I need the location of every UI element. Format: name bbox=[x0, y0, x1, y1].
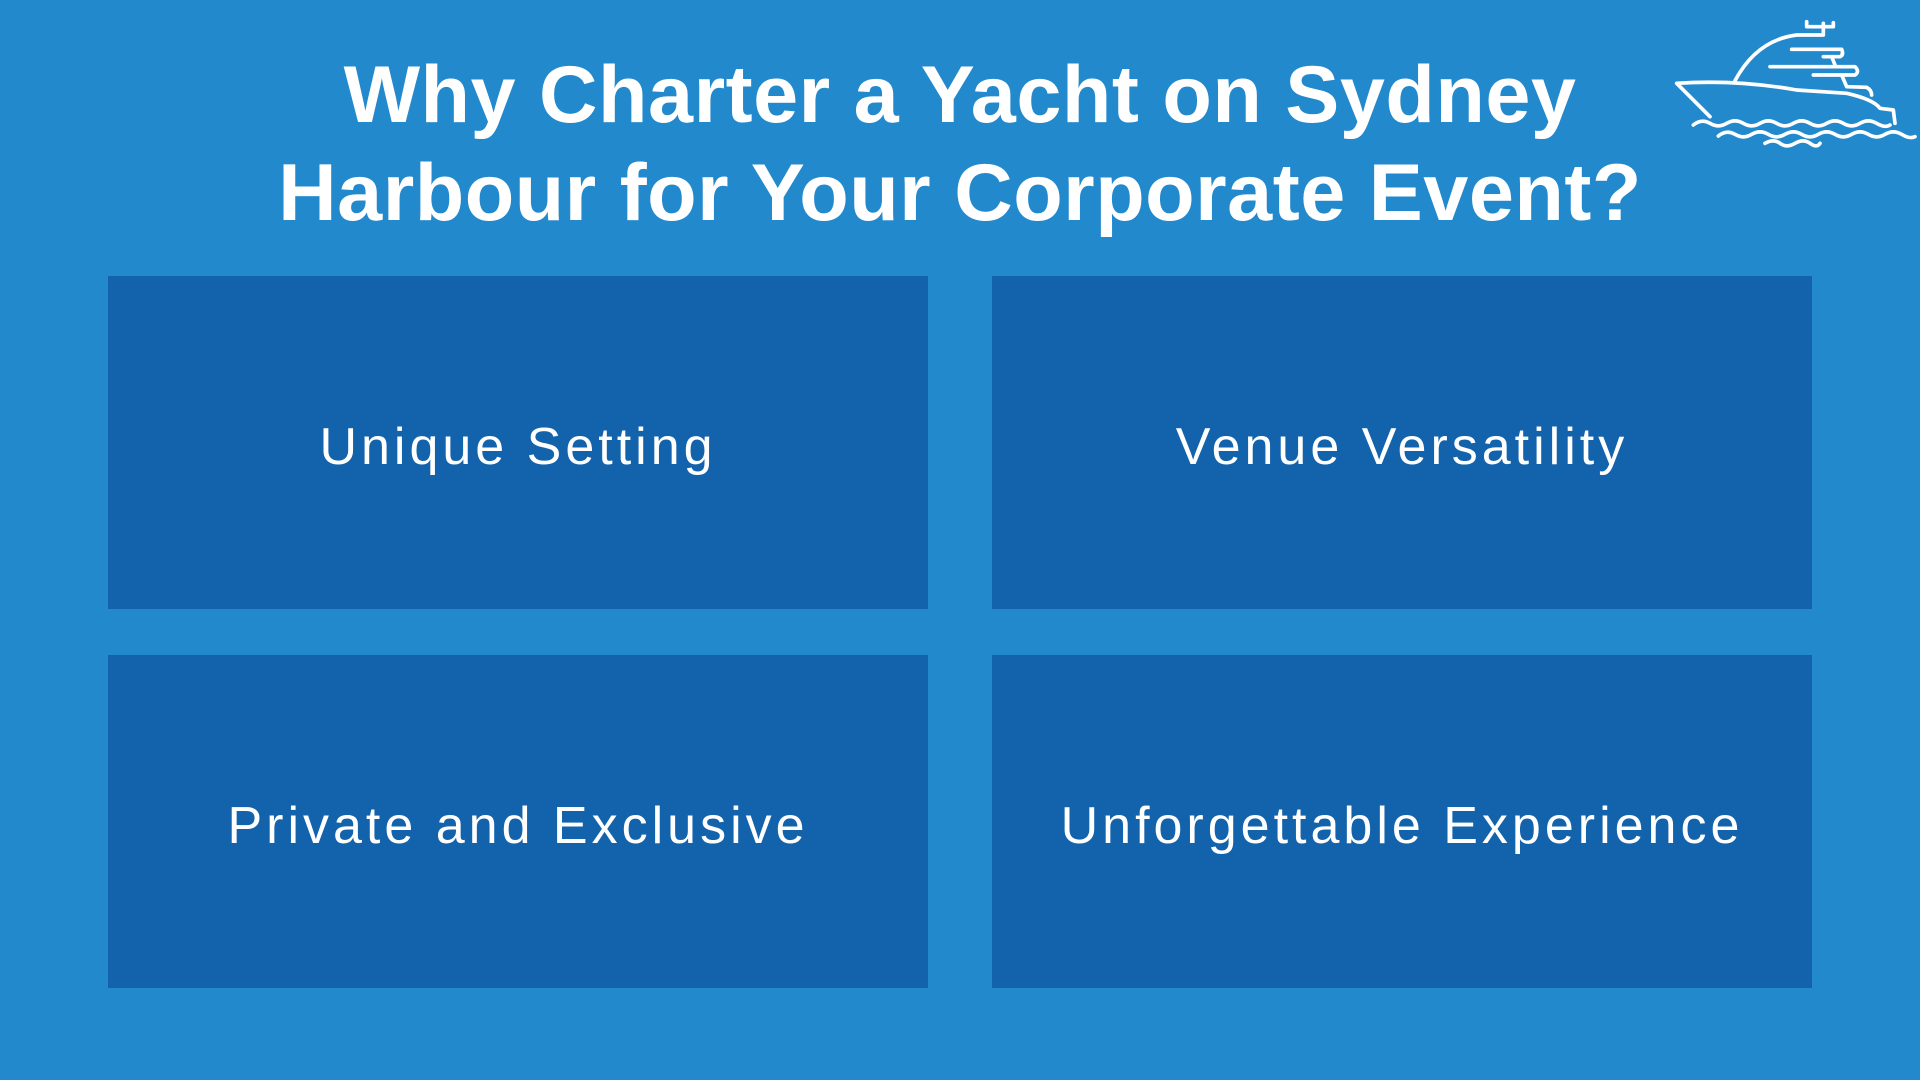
panel: Venue Versatility bbox=[992, 276, 1812, 609]
panel: Unforgettable Experience bbox=[992, 655, 1812, 988]
panel: Unique Setting: Unique Setting bbox=[319, 418, 717, 476]
title: Harbour for Your Corporate Event? bbox=[278, 148, 1642, 238]
panel: Private and Exclusive bbox=[108, 655, 928, 988]
icon: yacht bbox=[1674, 20, 1917, 148]
panel: Unique Setting bbox=[108, 276, 928, 609]
panel: Private and Exclusive: Private and Exclusive bbox=[227, 796, 809, 854]
title bbox=[278, 50, 1642, 238]
panel: Venue Versatility: Venue Versatility bbox=[1176, 418, 1628, 476]
title: Why Charter a Yacht on Sydney bbox=[344, 50, 1576, 140]
panel: Unforgettable Experience: Unforgettable Experience bbox=[1061, 796, 1743, 854]
